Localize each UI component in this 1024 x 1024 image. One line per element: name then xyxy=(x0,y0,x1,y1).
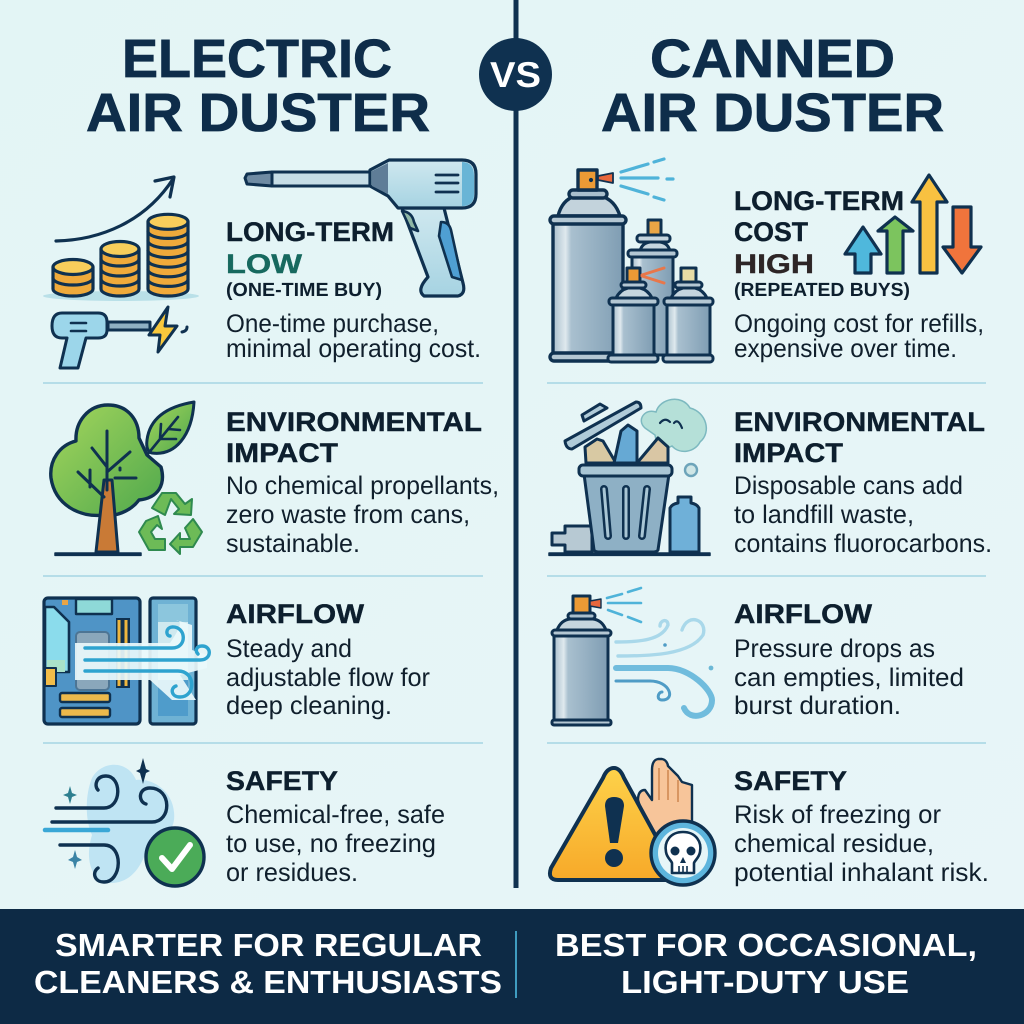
heading: environmental impact: ENVIRONMENTAL xyxy=(734,407,985,437)
text: electric airflow description: adjustable flow for xyxy=(226,664,430,692)
panel: canned safety xyxy=(550,759,989,887)
footer text: electric verdict: CLEANERS & ENTHUSIASTS xyxy=(34,964,502,1000)
text: canned airflow description: can empties, limited xyxy=(734,664,964,692)
text: canned cost description: Ongoing cost for refills, xyxy=(734,310,984,338)
VS badge xyxy=(479,38,552,111)
text: electric environmental description: zero waste from cans, xyxy=(226,501,470,529)
footer text: canned verdict: LIGHT-DUTY USE xyxy=(621,964,909,1000)
heading: long-term cost high: HIGH xyxy=(734,249,814,279)
icon: small electric duster with bolt xyxy=(52,307,187,368)
VS badge: VS xyxy=(490,54,541,95)
text: electric cost description xyxy=(226,310,481,363)
text: canned airflow description xyxy=(734,635,964,720)
text: canned airflow description: Pressure drops as xyxy=(734,635,935,663)
heading: long-term low: (ONE-TIME BUY) xyxy=(226,280,382,301)
heading: long-term low: LOW xyxy=(226,249,303,279)
heading: long-term low: LONG-TERM xyxy=(226,217,394,247)
heading: environmental impact: ENVIRONMENTAL xyxy=(226,407,482,437)
title: electric air duster: ELECTRIC xyxy=(122,29,392,89)
icon: circuit board with air stream xyxy=(44,598,209,724)
heading: long-term cost high xyxy=(734,186,910,301)
front left can xyxy=(608,268,658,362)
text: electric cost description: One-time purchase, xyxy=(226,310,439,338)
panel: electric airflow xyxy=(44,598,430,724)
heading: safety: SAFETY xyxy=(226,766,338,796)
heading: environmental impact xyxy=(734,407,985,468)
icon: tree, leaf and recycling xyxy=(51,402,202,555)
icon: clean air with check mark xyxy=(45,758,204,886)
heading: safety: SAFETY xyxy=(734,766,847,796)
text: canned safety description: Risk of freezing or xyxy=(734,801,942,829)
text: canned cost description: expensive over time. xyxy=(734,335,957,363)
text: electric airflow description xyxy=(226,635,430,720)
icon: coin stacks with rising arrow xyxy=(43,177,199,301)
footer text: electric verdict xyxy=(34,927,502,1000)
center divider line xyxy=(514,0,518,888)
icon: group of spray cans xyxy=(550,159,713,362)
text: canned safety description xyxy=(734,801,989,887)
icon: trash bin with cans and fumes xyxy=(549,399,710,555)
text: electric environmental description xyxy=(226,472,499,558)
back can xyxy=(628,220,677,355)
heading: environmental impact: IMPACT xyxy=(734,438,844,468)
text: electric safety description: or residues. xyxy=(226,859,358,887)
heading: long-term cost high: COST xyxy=(734,217,808,247)
footer text: canned verdict: BEST FOR OCCASIONAL, xyxy=(555,927,977,963)
text: canned environmental description xyxy=(734,472,992,558)
heading: airflow: AIRFLOW xyxy=(226,599,365,629)
text: electric environmental description: sustainable. xyxy=(226,530,360,558)
icon: spray can with weak airflow xyxy=(552,588,713,725)
heading: long-term low xyxy=(226,217,394,301)
icon: warning triangle, hand and skull xyxy=(550,759,715,885)
footer band xyxy=(0,909,1024,1024)
text: canned environmental description: Disposable cans add xyxy=(734,472,963,500)
icon: large electric air duster xyxy=(245,160,476,296)
panel: electric safety xyxy=(45,758,445,887)
icon: fluctuating cost arrows xyxy=(845,175,981,273)
text: canned airflow description: burst duration. xyxy=(734,692,901,720)
heading: airflow: AIRFLOW xyxy=(734,599,873,629)
text: canned environmental description: to landfill waste, xyxy=(734,501,914,529)
heading: long-term cost high: LONG-TERM xyxy=(734,186,904,216)
heading: environmental impact: IMPACT xyxy=(226,438,339,468)
panel: canned environmental impact xyxy=(549,399,992,558)
heading: environmental impact xyxy=(226,407,482,468)
text: electric airflow description: deep cleaning. xyxy=(226,692,392,720)
text: canned environmental description: contains fluorocarbons. xyxy=(734,530,992,558)
panel: electric long-term cost xyxy=(43,160,481,368)
text: canned safety description: potential inhalant risk. xyxy=(734,859,989,887)
title: electric air duster xyxy=(86,29,430,143)
text: electric safety description xyxy=(226,801,445,887)
text: canned cost description xyxy=(734,310,984,363)
spray lines xyxy=(621,159,673,200)
title: canned air duster: CANNED xyxy=(650,29,895,89)
large can xyxy=(550,170,656,361)
text: electric safety description: to use, no freezing xyxy=(226,830,436,858)
title: electric air duster: AIR DUSTER xyxy=(86,83,430,143)
text: electric airflow description: Steady and xyxy=(226,635,352,663)
heading: long-term cost high: (REPEATED BUYS) xyxy=(734,280,910,301)
text: electric cost description: minimal operating cost. xyxy=(226,335,481,363)
footer text: canned verdict xyxy=(555,927,977,1000)
text: electric safety description: Chemical-free, safe xyxy=(226,801,445,829)
panel: electric environmental impact xyxy=(51,402,499,558)
title: canned air duster: AIR DUSTER xyxy=(601,83,944,143)
text: electric environmental description: No chemical propellants, xyxy=(226,472,499,500)
text: canned safety description: chemical residue, xyxy=(734,830,934,858)
footer text: electric verdict: SMARTER FOR REGULAR xyxy=(55,927,482,963)
front right can xyxy=(663,268,713,362)
panel: canned airflow xyxy=(552,588,964,725)
panel: canned long-term cost xyxy=(550,159,984,363)
title: canned air duster xyxy=(601,29,944,143)
